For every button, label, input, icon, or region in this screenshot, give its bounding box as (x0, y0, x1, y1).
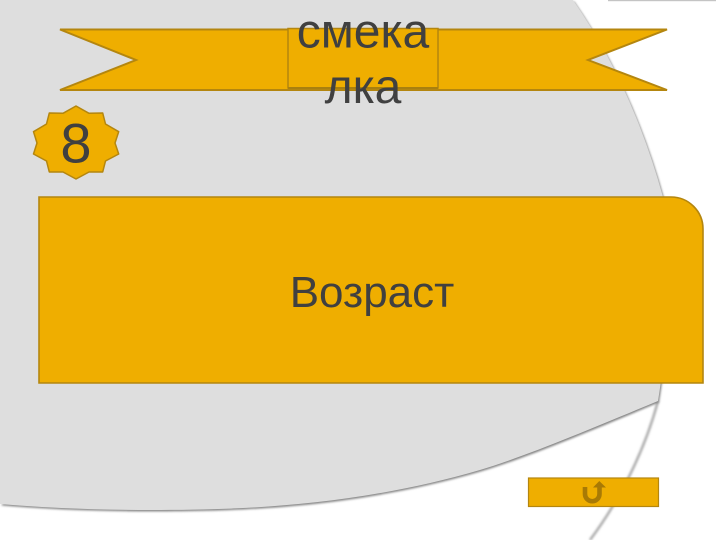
ribbon banner (60, 30, 667, 90)
background outer arc (590, 0, 716, 540)
number badge (34, 106, 119, 179)
title text: лка (325, 61, 402, 114)
number 8: 8 (60, 112, 92, 174)
title box (288, 6, 438, 114)
icon: u-turn arrow (585, 481, 606, 501)
return button (528, 478, 658, 506)
title text: смека (297, 6, 429, 58)
answer text: Возраст (290, 268, 454, 317)
